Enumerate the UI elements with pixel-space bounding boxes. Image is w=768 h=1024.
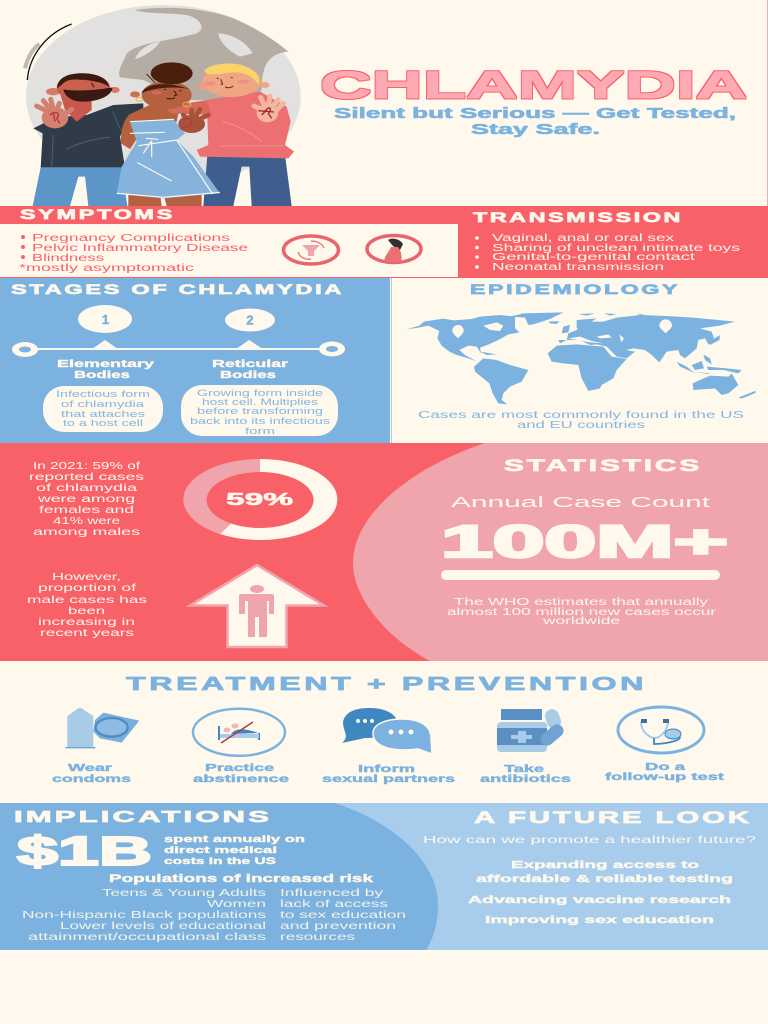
icon: stethoscope	[618, 707, 704, 753]
icon: abstinence bed	[193, 709, 285, 756]
female statistic text: In 2021: 59% of	[33, 460, 140, 472]
WHO estimate text: The WHO estimates that annually	[454, 597, 708, 608]
treatment labels: condoms	[52, 773, 131, 785]
icon: antibiotics bottle	[497, 707, 566, 752]
subtitle: Stay Safe.	[471, 121, 600, 138]
icon: uterus	[284, 236, 338, 264]
stage labels: Reticular	[212, 358, 288, 370]
female statistic text	[29, 460, 144, 538]
risk explanation: to sex education	[280, 910, 406, 921]
WHO estimate text: worldwide	[541, 616, 621, 627]
female statistic text: were among	[36, 493, 135, 505]
risk populations list: Non-Hispanic Black populations	[22, 910, 266, 921]
cost description: spent annually on	[164, 834, 305, 845]
icon: map pin Asia	[659, 319, 672, 333]
male statistic text: proportion of	[38, 582, 136, 594]
icon: pregnant woman	[367, 236, 421, 262]
epidemiology caption	[418, 410, 745, 431]
annual case count label: Annual Case Count	[451, 494, 712, 511]
WHO estimate text: almost 100 million new cases occur	[447, 607, 717, 618]
treatment labels: antibiotics	[480, 773, 571, 785]
risk explanation: Influenced by	[280, 888, 383, 899]
panel: transmission	[458, 206, 768, 277]
divider bar	[441, 570, 720, 580]
risk explanation	[280, 888, 406, 943]
transmission list: Sharing of unclean intimate toys	[492, 243, 740, 254]
heading: stages: STAGES OF CHLAMYDIA	[11, 281, 344, 297]
callout: reticular bodies: back into its infectious	[190, 416, 331, 426]
title: CHLAMYDIA	[320, 65, 747, 107]
stage labels	[57, 358, 288, 381]
big number 100M+: 100M+	[441, 516, 728, 567]
woman in blue dress	[117, 62, 220, 206]
female statistic text: of chlamydia	[36, 482, 137, 494]
risk populations list: attainment/occupational class	[28, 932, 266, 943]
cost description	[164, 834, 305, 867]
future actions	[468, 859, 733, 926]
heading: implications: IMPLICATIONS	[14, 809, 272, 826]
callout: elementary bodies: Infectious form	[56, 389, 150, 399]
male statistic text	[27, 571, 147, 639]
panel: treatment and prevention	[52, 674, 725, 785]
cost description: costs in the US	[164, 856, 276, 867]
callout: reticular bodies: before transforming	[197, 406, 323, 416]
panel: a future look	[0, 803, 768, 950]
heading: a future look: A FUTURE LOOK	[474, 809, 752, 827]
male statistic text: been	[68, 605, 105, 617]
WHO estimate text	[447, 597, 717, 627]
female statistic text: reported cases	[29, 471, 144, 483]
treatment labels: sexual partners	[322, 773, 455, 785]
stage labels: Elementary	[57, 358, 154, 370]
panel: implications	[0, 803, 438, 950]
risk explanation: and prevention	[280, 921, 396, 932]
icon: up arrow with person	[190, 565, 324, 647]
treatment labels: Inform	[358, 763, 415, 775]
bearded man	[33, 73, 143, 206]
donut chart 59%	[183, 459, 337, 540]
donut chart 59%: 59%	[226, 489, 294, 509]
risk populations list	[22, 888, 266, 943]
symptom list: Pregnancy Complications	[32, 233, 230, 244]
female statistic text: among males	[33, 526, 140, 538]
symptom list: *mostly asymptomatic	[19, 263, 194, 274]
heading: transmission: TRANSMISSION	[473, 209, 683, 225]
epidemiology caption: and EU countries	[517, 420, 645, 431]
callout: elementary bodies: to a host cell	[63, 418, 143, 428]
future actions: Expanding access to	[511, 859, 699, 871]
treatment labels: abstinence	[193, 773, 289, 785]
risk explanation: lack of access	[280, 899, 388, 910]
heading: epidemiology: EPIDEMIOLOGY	[470, 281, 680, 297]
treatment labels	[52, 761, 725, 785]
icon: condom	[65, 708, 139, 748]
epidemiology caption: Cases are most commonly found in the US	[418, 410, 745, 421]
icon: speech bubbles	[342, 708, 432, 754]
heading: treatment + prevention: TREATMENT + PREVENTION	[126, 674, 647, 694]
male statistic text: male cases has	[27, 594, 147, 606]
symptom list: Blindness	[32, 253, 104, 264]
callout: reticular bodies: form	[245, 426, 275, 436]
treatment labels: follow-up test	[605, 771, 725, 783]
subheading: populations of increased risk: Populations of increased risk	[109, 873, 375, 885]
heading: symptoms: SYMPTOMS	[20, 207, 175, 222]
callout: elementary bodies: that attaches	[61, 409, 146, 419]
heading: statistics: STATISTICS	[504, 457, 702, 475]
icon: map pin US	[452, 325, 464, 338]
risk populations list: Women	[207, 899, 266, 910]
callout: reticular bodies: Growing form inside	[197, 388, 323, 398]
timeline: 1	[102, 312, 109, 327]
panel: statistics band	[0, 443, 768, 661]
future actions: Advancing vaccine research	[468, 894, 731, 906]
risk populations list: Teens & Young Adults	[102, 888, 266, 899]
callout: reticular bodies	[181, 385, 338, 436]
panel: epidemiology	[391, 278, 756, 443]
transmission list: Vaginal, anal or oral sex	[492, 233, 674, 244]
treatment labels: Take	[504, 763, 544, 775]
timeline	[12, 305, 345, 357]
future question: How can we promote a healthier future?	[423, 835, 757, 846]
female statistic text: females and	[39, 504, 134, 516]
callout: reticular bodies: host cell. Multiplies	[202, 397, 319, 407]
future actions: Improving sex education	[485, 914, 714, 926]
blonde man	[197, 63, 294, 206]
timeline: 2	[246, 312, 254, 328]
callout: elementary bodies	[43, 386, 163, 432]
treatment labels: Wear	[68, 762, 112, 774]
cost description: direct medical	[164, 845, 277, 856]
panel: stages of chlamydia	[0, 278, 390, 443]
stage labels: Bodies	[74, 369, 130, 381]
male statistic text: recent years	[40, 627, 134, 639]
callout: elementary bodies: of chlamydia	[61, 399, 144, 409]
subtitle	[334, 105, 736, 138]
male statistic text: increasing in	[38, 616, 135, 628]
panel: symptoms	[0, 206, 768, 278]
treatment labels: Do a	[645, 761, 685, 773]
female statistic text: 41% were	[53, 515, 120, 527]
transmission list	[475, 233, 740, 273]
symptom list	[19, 233, 249, 274]
future actions: affordable & reliable testing	[476, 873, 733, 885]
big number $1B: $1B	[17, 828, 152, 874]
treatment labels: Practice	[205, 762, 274, 774]
risk explanation: resources	[280, 932, 355, 943]
symptom list: Pelvic Inflammatory Disease	[32, 243, 249, 254]
transmission list: Genital-to-genital contact	[492, 252, 695, 263]
subtitle: Silent but Serious — Get Tested,	[334, 105, 736, 122]
stage labels: Bodies	[220, 369, 276, 381]
illustration: three people in front of a globe	[25, 5, 301, 206]
world map	[407, 312, 756, 404]
risk populations list: Lower levels of educational	[60, 921, 266, 932]
male statistic text: However,	[52, 571, 121, 583]
transmission list: Neonatal transmission	[492, 262, 664, 273]
